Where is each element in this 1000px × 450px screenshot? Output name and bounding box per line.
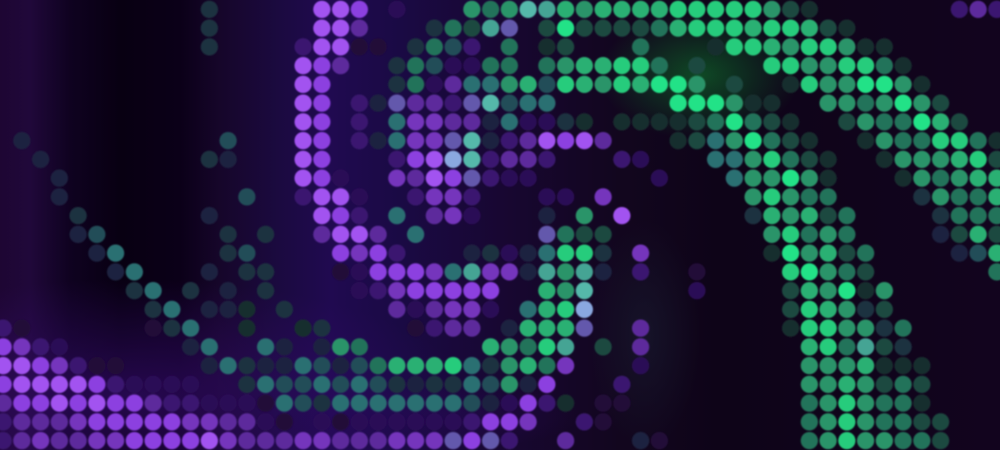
- dot row 23: [3, 421, 941, 423]
- dot row 18: [3, 327, 903, 329]
- dot row 12: [78, 215, 997, 217]
- dot row 20: [3, 365, 922, 367]
- dot row 4: [303, 65, 903, 67]
- dot row 5: [303, 83, 922, 85]
- dot row 7: [303, 121, 959, 123]
- dot row 14: [97, 252, 997, 254]
- dot row 2: [209, 27, 847, 29]
- dot row 6: [303, 102, 941, 104]
- dot row 16: [134, 290, 884, 292]
- dot row 1: [209, 8, 997, 10]
- dot row 22: [3, 402, 922, 404]
- dot row 21: [3, 383, 922, 385]
- dot row 3: [209, 46, 884, 48]
- dot row 19: [3, 346, 903, 348]
- dot row 15: [116, 271, 997, 273]
- dot row 8: [22, 140, 997, 142]
- dot row 24: [3, 440, 941, 442]
- dot row 10: [59, 177, 997, 179]
- dot row 17: [153, 308, 884, 310]
- dot row 11: [59, 196, 997, 198]
- dot row 13: [78, 233, 997, 235]
- dot row 9: [41, 158, 997, 160]
